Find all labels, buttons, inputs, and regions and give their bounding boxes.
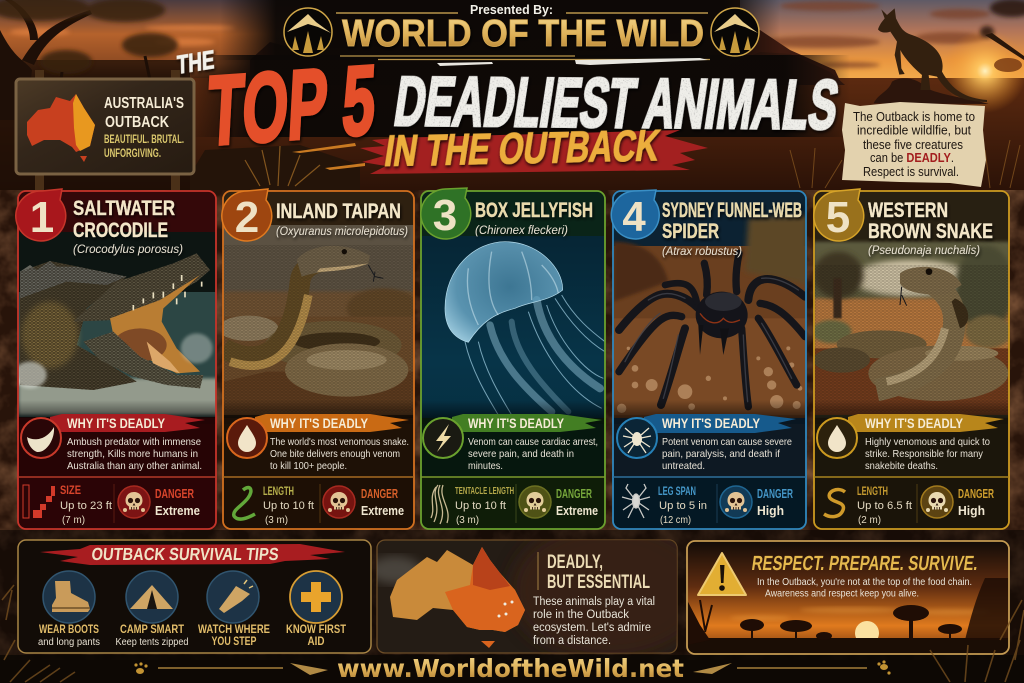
card 3 why it's deadly: minutes. (468, 460, 503, 472)
icon: tentacles (431, 485, 448, 524)
mountain and rocks (250, 30, 842, 85)
card 3 heading: BOX JELLYFISH (475, 199, 593, 222)
card 5 heading (868, 199, 993, 257)
sign text: UNFORGIVING. (104, 148, 161, 160)
card 1 stats: (7 m) (62, 515, 85, 526)
badge number 3: 3 (433, 191, 457, 240)
sign text: AUSTRALIA'S (104, 95, 184, 112)
badge number 2: 2 (235, 193, 259, 242)
map of Australia (390, 547, 525, 648)
card 2 stats: (3 m) (265, 515, 288, 526)
essential text (533, 596, 655, 647)
footer url: www.WorldoftheWild.net (337, 654, 684, 683)
card 4 stats: (12 cm) (660, 515, 691, 526)
card 4: sydney funnel-web spider (611, 190, 808, 529)
card 3 heading (475, 199, 593, 237)
icon: golden snake (824, 490, 845, 517)
icon: skull danger (921, 486, 953, 518)
card 3 stats: Up to 10 ft (455, 500, 506, 512)
card 4 heading: (Atrax robustus) (662, 244, 742, 258)
card 5 heading: WESTERN (868, 199, 948, 222)
sign: Australia's Outback (16, 70, 194, 190)
tip: camp smart: Keep tents zipped (116, 637, 188, 648)
tip: first aid: AID (308, 636, 324, 648)
logo left (284, 8, 332, 56)
tips heading (40, 544, 345, 565)
icon: Australia map on sign (27, 94, 95, 162)
icon: skull danger (118, 486, 150, 518)
tip: camp smart: CAMP SMART (120, 624, 184, 636)
card 4 heading: SPIDER (662, 220, 719, 243)
card 1 why it's deadly: strength, Kills more humans in (67, 448, 198, 460)
logo right (711, 8, 759, 56)
tip: first aid: KNOW FIRST (286, 624, 346, 636)
card 2: inland taipan (218, 189, 420, 529)
card 1 heading (73, 197, 183, 256)
card 1 stats (23, 483, 200, 526)
badge number 1: 1 (30, 193, 54, 242)
card 1 heading: SALTWATER (73, 197, 175, 220)
kangaroo on rock (874, 8, 989, 104)
icon: lightning (423, 418, 463, 458)
respect text: Awareness and respect keep you alive. (765, 588, 919, 600)
icon: jaw (21, 418, 61, 458)
card 2 heading (276, 200, 408, 238)
tip: wear boots: WEAR BOOTS (39, 624, 99, 636)
icon: spider outline (622, 484, 650, 518)
essential heading (547, 552, 650, 593)
respect text (757, 577, 972, 600)
card 3 stats: DANGER (556, 486, 592, 501)
icon: drop (227, 418, 267, 458)
card 3 stats (431, 484, 598, 526)
note: parchment: these five creatures (863, 138, 963, 152)
card 5 heading: (Pseudonaja nuchalis) (868, 243, 980, 257)
footer ornaments (134, 660, 891, 675)
card 1 why it's deadly: WHY IT'S DEADLY (67, 415, 166, 431)
card 5 stats: High (958, 503, 985, 518)
tips heading: OUTBACK SURVIVAL TIPS (91, 544, 280, 564)
card 5 stats: DANGER (958, 486, 994, 501)
card 5 stats: Up to 6.5 ft (857, 500, 912, 512)
gold rules (340, 56, 710, 60)
icon: spider (617, 418, 657, 458)
card 4 stats: LEG SPAN (658, 484, 696, 498)
acacia trees (688, 578, 1008, 638)
card 5 why it's deadly: WHY IT'S DEADLY (865, 415, 964, 431)
tip: wear boots: and long pants (38, 637, 100, 648)
badge number 2 (222, 189, 272, 242)
card 5 why it's deadly: snakebite deaths. (865, 460, 938, 472)
card 5 why it's deadly (817, 414, 1004, 472)
essential text: ecosystem. Let's admire (533, 622, 651, 634)
card 1 why it's deadly: Australia than any other animal. (67, 460, 202, 472)
card 3 why it's deadly: severe pain, and death in (468, 448, 574, 460)
card 5: western brown snake (812, 189, 1015, 529)
respect text: In the Outback, you're not at the top of the food chain. (757, 577, 972, 588)
footer foliage (2, 585, 1024, 682)
card 5 stats (824, 484, 994, 526)
panel: respect prepare survive (687, 541, 1009, 654)
sign text: BEAUTIFUL. BRUTAL. (104, 134, 184, 146)
note: parchment: incredible wildlfie, but (857, 124, 972, 138)
tree left (0, 0, 178, 120)
card 1 why it's deadly (21, 414, 205, 472)
essential text: role in the Outback (533, 609, 629, 621)
badge number 4: 4 (622, 193, 646, 240)
tip: first aid (286, 571, 346, 648)
title: THE: THE (177, 44, 215, 80)
icon: green snake (234, 488, 255, 519)
tip: watch where you step: WATCH WHERE (198, 624, 270, 636)
title ribbon: in the outback: IN THE OUTBACK (381, 121, 663, 176)
card 4 stats (622, 484, 793, 526)
card 4 why it's deadly: WHY IT'S DEADLY (662, 415, 761, 431)
badge number 5 (814, 189, 864, 242)
card 1 stats: Up to 23 ft (60, 500, 112, 512)
card 2 stats: LENGTH (263, 484, 294, 498)
badge number 5: 5 (826, 193, 850, 242)
card 4 stats: High (757, 503, 784, 518)
white brush stroke (437, 58, 708, 66)
essential heading: BUT ESSENTIAL (547, 572, 650, 593)
header scene (0, 0, 1024, 190)
card 3 stats: (3 m) (456, 515, 479, 526)
title: TOP 5: TOP 5 (205, 44, 378, 166)
card 2 stats: Extreme (361, 503, 404, 518)
note: parchment (842, 102, 986, 187)
card 4 stats: Up to 5 in (659, 500, 707, 512)
card 4 stats: DANGER (757, 486, 793, 501)
panel: deadly but essential (376, 539, 678, 654)
tip: watch where you step (198, 571, 270, 648)
card 2 why it's deadly (227, 414, 409, 472)
icon: skull danger (519, 486, 551, 518)
card 5 why it's deadly: strike. Responsible for many (865, 448, 984, 460)
card 3 why it's deadly (423, 414, 602, 472)
panel: survival tips (18, 540, 371, 653)
essential text: These animals play a vital (533, 596, 655, 608)
card 4 why it's deadly: pain, paralysis, and death if (662, 448, 780, 460)
sign text: OUTBACK (105, 114, 169, 131)
card 3 heading: (Chironex fleckeri) (475, 223, 568, 237)
card 3: box jellyfish (421, 188, 605, 529)
card 2 heading: (Oxyuranus microlepidotus) (276, 224, 408, 238)
card 1: saltwater crocodile (13, 189, 219, 529)
orange streaks (292, 142, 365, 170)
card 2 why it's deadly: to kill 100+ people. (270, 460, 347, 472)
card 2 stats (234, 484, 404, 526)
card 4 why it's deadly: untreated. (662, 460, 705, 472)
card 1 stats: SIZE (60, 483, 81, 497)
card 5 why it's deadly: Highly venomous and quick to (865, 436, 990, 448)
sign text (104, 95, 184, 160)
card 2 stats: DANGER (361, 486, 398, 501)
card 4 why it's deadly (617, 414, 796, 472)
card 1 stats: Extreme (155, 503, 200, 518)
tip: camp smart (116, 571, 188, 648)
icon: warning triangle (698, 553, 746, 595)
card 1 heading: (Crocodylus porosus) (73, 242, 183, 256)
presented by: Presented By: (470, 3, 553, 17)
essential text: from a distance. (533, 635, 611, 647)
card 3 why it's deadly: WHY IT'S DEADLY (468, 415, 565, 431)
card 5 stats: LENGTH (857, 484, 888, 498)
card 2 why it's deadly: WHY IT'S DEADLY (270, 415, 369, 431)
card 1 stats: DANGER (155, 486, 194, 501)
card 2 why it's deadly: The world's most venomous snake. (270, 436, 409, 448)
bush on left (190, 145, 360, 190)
tree right (980, 0, 1024, 72)
badge number 3 (421, 188, 471, 240)
tip: wear boots (38, 571, 100, 648)
badge number 4 (611, 190, 659, 240)
card 5 stats: (2 m) (858, 515, 881, 526)
card 2 why it's deadly: One bite delivers enough venom (270, 448, 400, 460)
brand title: WORLD OF THE WILD (342, 13, 704, 55)
card 2 heading: INLAND TAIPAN (276, 200, 401, 223)
card 3 stats: TENTACLE LENGTH (455, 486, 514, 497)
icon: skull danger (720, 486, 752, 518)
card 3 why it's deadly: Venom can cause cardiac arrest, (468, 436, 598, 448)
card 4 heading: SYDNEY FUNNEL-WEB (662, 199, 802, 222)
essential heading: DEADLY, (547, 552, 603, 573)
tip: watch where you step: YOU STEP (212, 636, 257, 648)
card 4 heading (662, 199, 802, 258)
note: parchment: The Outback is home to (853, 110, 975, 124)
icon: skull danger (323, 486, 355, 518)
icon: drop (817, 418, 857, 458)
note: parchment: Respect is survival. (863, 165, 959, 179)
card 3 stats: Extreme (556, 503, 598, 518)
badge number 1 (16, 189, 66, 242)
card 1 heading: CROCODILE (73, 219, 168, 242)
icon: size (23, 485, 55, 518)
card 4 why it's deadly: Potent venom can cause severe (662, 436, 792, 448)
note: parchment: can be DEADLY. (870, 151, 954, 165)
card 1 why it's deadly: Ambush predator with immense (67, 436, 201, 448)
card 2 stats: Up to 10 ft (263, 500, 314, 512)
